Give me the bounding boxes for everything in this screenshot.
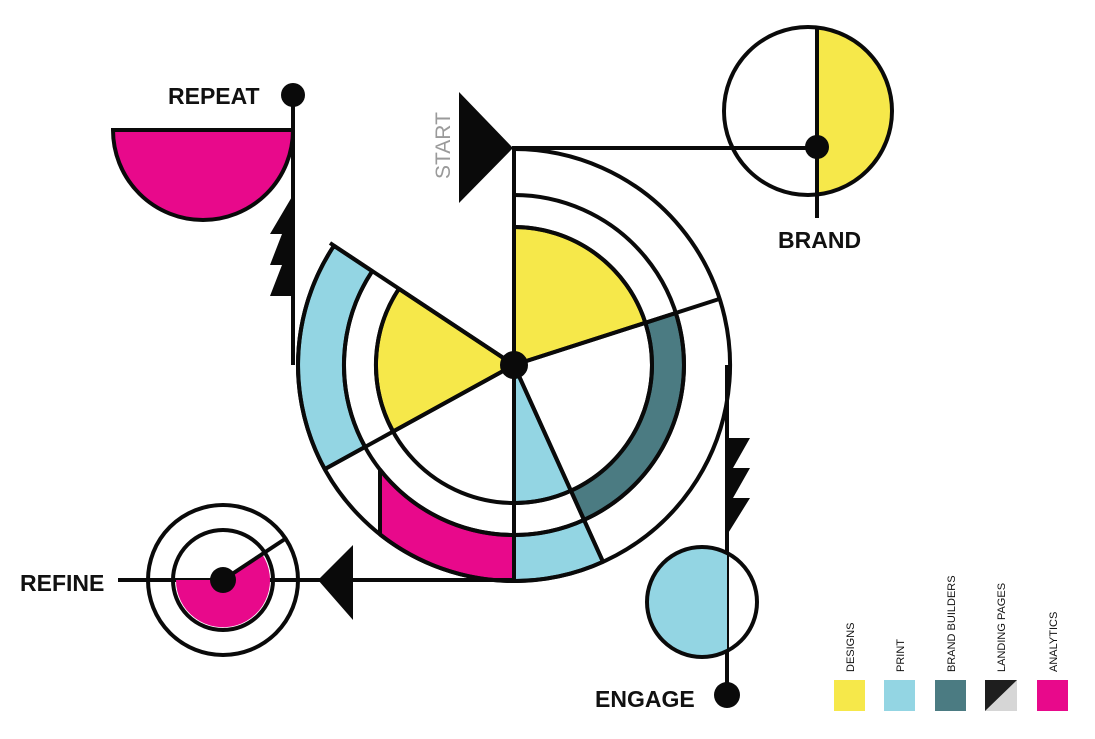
refine node: REFINE (20, 570, 104, 596)
legend: ANALYTICS (1048, 612, 1060, 672)
repeat node (113, 83, 305, 296)
yellow wedge top-right (514, 227, 645, 365)
magenta band (380, 470, 514, 581)
legend (834, 575, 1068, 711)
refine node (20, 505, 353, 655)
yellow wedge left (376, 289, 514, 432)
connector lines (118, 95, 817, 695)
cyan outer band left (298, 246, 372, 469)
brand node (724, 27, 892, 253)
legend: BRAND BUILDERS (946, 575, 958, 672)
cyan inner wedge (514, 365, 571, 503)
start: triangle and label: START (432, 112, 455, 179)
legend: DESIGNS (845, 622, 857, 672)
repeat node: REPEAT (168, 83, 260, 109)
main wheel (298, 146, 730, 581)
legend: PRINT (895, 639, 907, 672)
start: triangle and label (432, 92, 513, 203)
engage node: ENGAGE (595, 686, 695, 712)
brand node: BRAND (778, 227, 861, 253)
teal band (571, 313, 684, 520)
legend: LANDING PAGES (996, 583, 1008, 672)
engage node (595, 438, 757, 712)
cyan outer band bottom (514, 520, 603, 581)
